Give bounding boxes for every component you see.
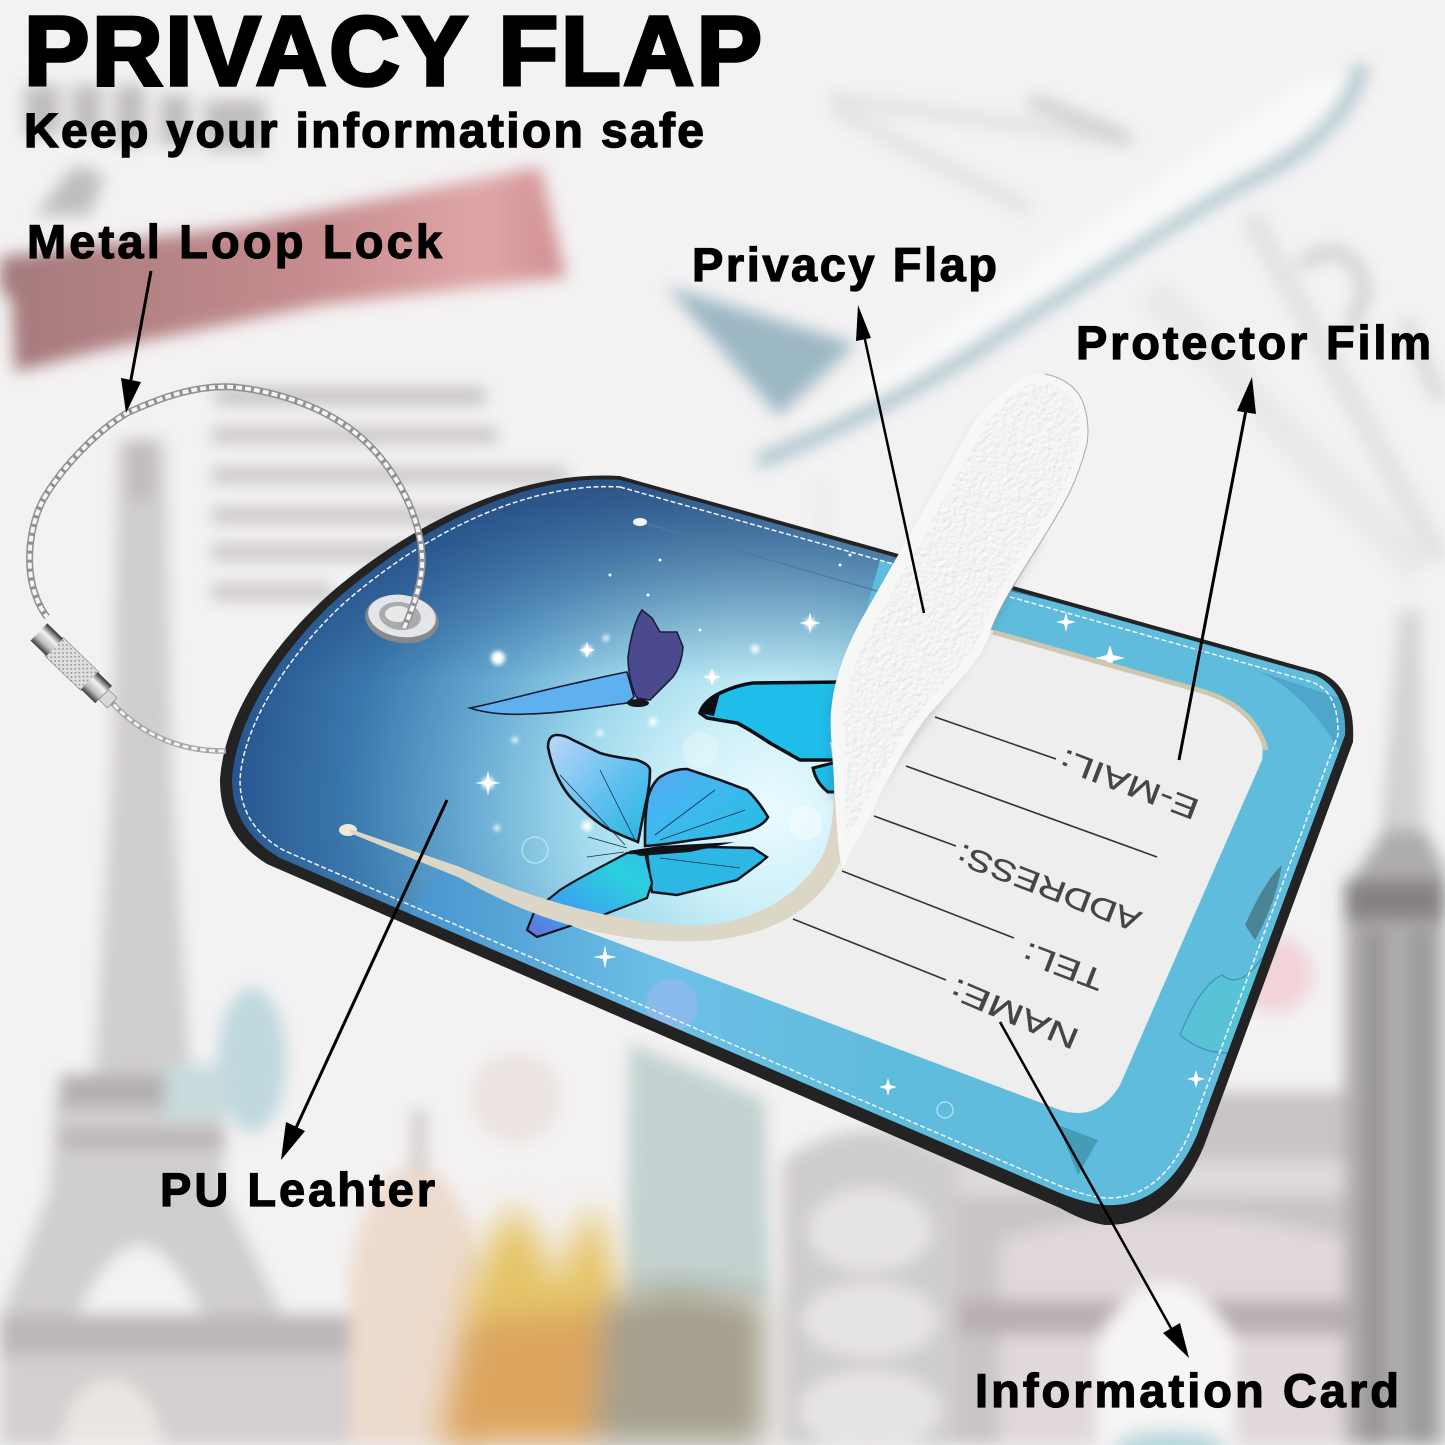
metal loop ring [30, 387, 422, 751]
background: pink circle [1237, 937, 1313, 1013]
arrow: metal loop lock [121, 271, 151, 413]
sparkles [475, 554, 1205, 1096]
slot line top [640, 522, 880, 592]
background: blurred lettering [25, 85, 265, 215]
card window [570, 628, 1266, 1113]
flap leather texture [844, 382, 1080, 840]
background: peach dome [350, 1160, 485, 1445]
label: metal loop lock: Metal Loop Lock [27, 215, 443, 268]
background: Statue of Liberty [625, 1043, 770, 1300]
eyelet [362, 590, 442, 648]
tag black edge [220, 476, 1353, 1225]
background: arch [958, 1092, 1345, 1445]
butterfly: small top [470, 610, 683, 714]
card label: e-mail: E-MAIL: [1055, 742, 1204, 825]
label: pu leather: PU Leahter [160, 1163, 435, 1216]
beige flap edge [350, 742, 850, 941]
background: skyscraper [1345, 610, 1445, 1445]
background: airplane [666, 65, 1440, 640]
background: Eiffel tower [0, 440, 285, 1320]
background: ribbon [0, 167, 566, 372]
background: soft trees [440, 1205, 765, 1445]
luggage tag [200, 374, 1380, 1240]
arrow: privacy flap [856, 305, 924, 613]
subtitle: Keep your information safe [24, 105, 704, 158]
arrow: protector film [1179, 377, 1256, 760]
label: protector film: Protector Film [1076, 316, 1431, 369]
bokeh circles [522, 732, 953, 1118]
label: information card: Information Card [975, 1364, 1399, 1417]
arrow: information card [1000, 1022, 1189, 1358]
slot hole bottom [339, 824, 357, 836]
flap shadow [830, 420, 1040, 800]
butterfly: centre [527, 735, 768, 937]
stitching [240, 487, 1338, 1198]
background: low city band [0, 1315, 440, 1355]
sparkle glows [482, 618, 815, 831]
tag printed face [232, 480, 1346, 1206]
background: teal blobs [218, 988, 286, 1132]
arrow: pu leather [281, 800, 447, 1160]
card form lines [793, 717, 1157, 980]
background: blurred text block [212, 388, 567, 599]
label: privacy flap: Privacy Flap [692, 238, 997, 291]
icon: knurled screw clasp [30, 623, 121, 712]
background: domed building [783, 1130, 958, 1445]
teal border area of the face [400, 560, 1380, 1240]
flap right outline [991, 374, 1088, 630]
card label: address: ADDRESS: [953, 837, 1146, 937]
slot hole top [633, 518, 647, 526]
peeled privacy flap [831, 374, 1088, 867]
card label: tel: TEL: [1018, 935, 1109, 996]
marble streaks [1058, 665, 1345, 1175]
card label: name: NAME: [946, 971, 1084, 1055]
butterfly: large right, behind flap [700, 682, 845, 792]
card top beige edge [993, 632, 1266, 750]
